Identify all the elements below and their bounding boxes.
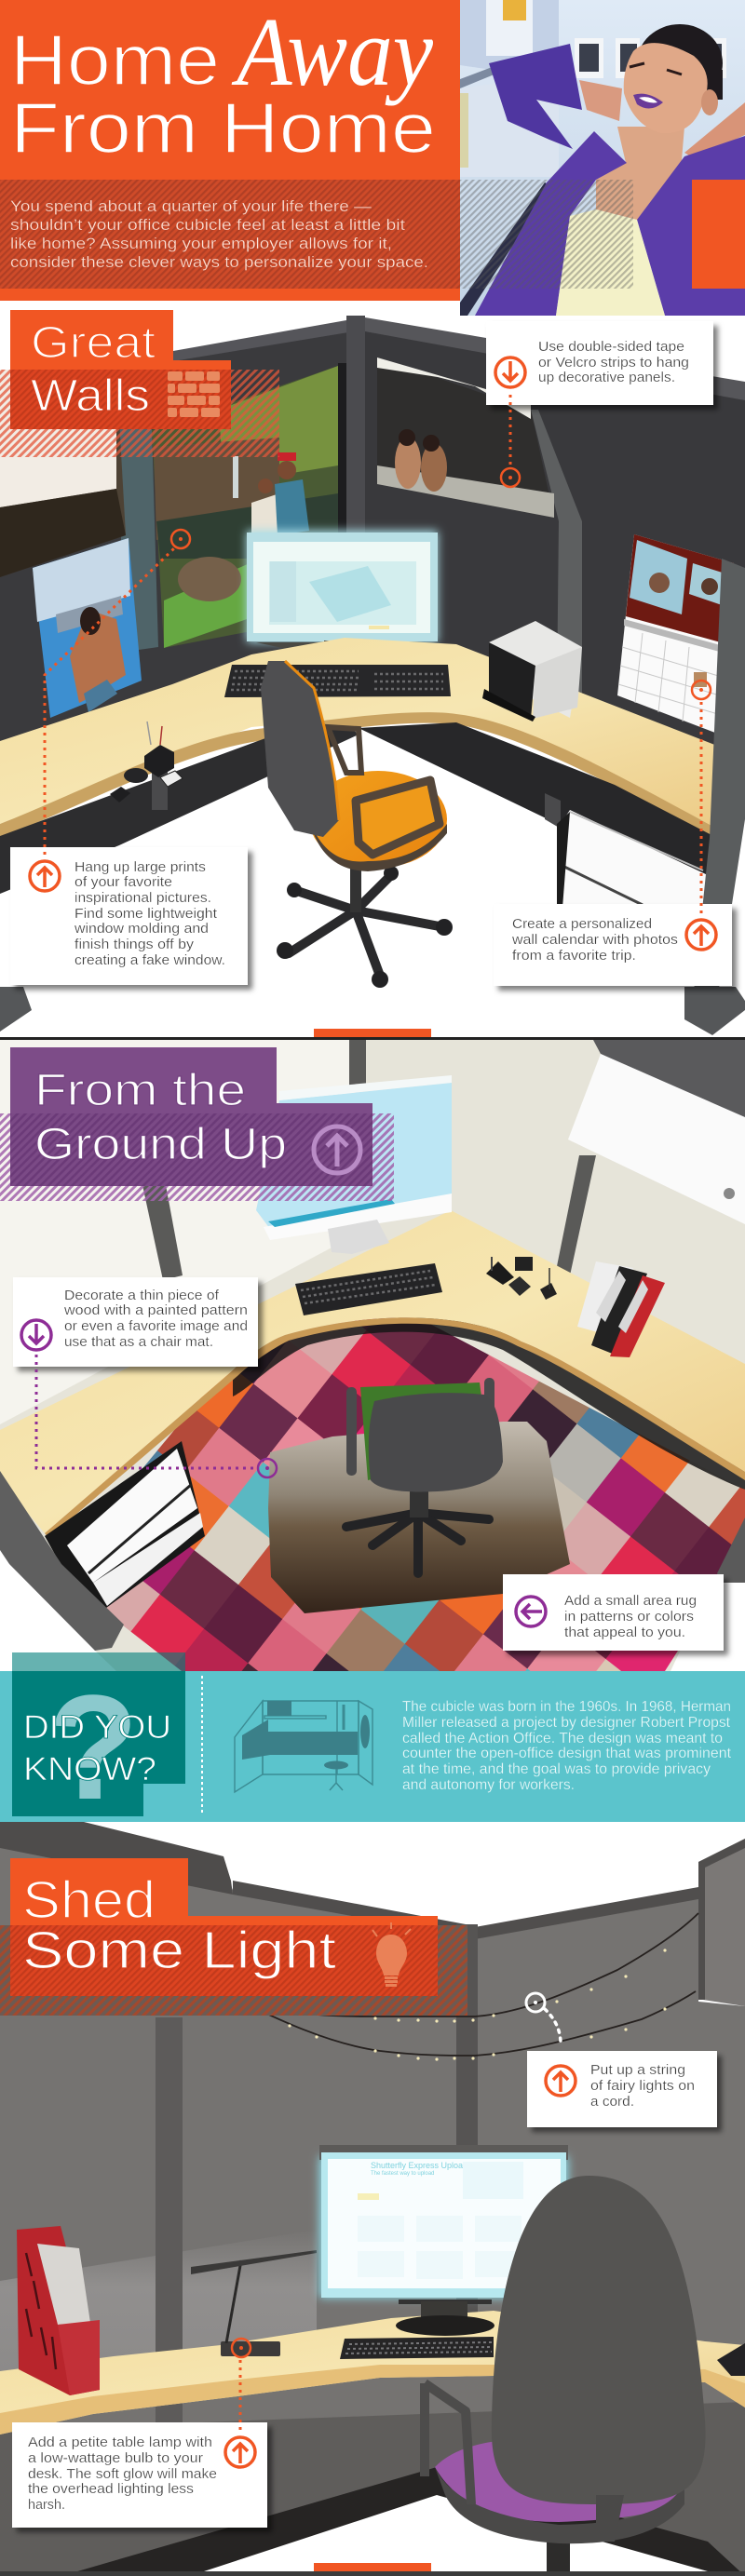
- callout: large prints: of your favorite: [74, 874, 172, 890]
- callout: large prints: finish things off by: [74, 937, 195, 952]
- hair and face: [637, 24, 723, 102]
- heading: shed some light: [10, 1858, 438, 1996]
- picture: couple on boat: [33, 538, 142, 718]
- red magazine file: [17, 2226, 100, 2395]
- scene: shed some light cubicle: [0, 1822, 745, 2576]
- header background: [0, 0, 460, 301]
- desk: [0, 638, 729, 838]
- title: Home: [10, 20, 220, 101]
- picture: beach strip: [0, 370, 126, 577]
- desk accessories: [486, 1257, 557, 1300]
- fact text: [402, 1699, 732, 1793]
- pointer: dotted leader: [232, 2339, 251, 2432]
- office chair, green: [346, 1378, 503, 1573]
- badge: DID YOU: [23, 1709, 171, 1746]
- intro text band: consider these clever ways to personalize your space.: [10, 253, 428, 271]
- callout: wall calendar: from a favorite trip.: [512, 948, 636, 964]
- callout: wall calendar: Create a personalized: [512, 916, 652, 932]
- under-desk floor: [0, 2402, 745, 2576]
- callout: large prints: Hang up large prints: [74, 859, 206, 875]
- under-desk panels: [0, 722, 717, 894]
- badge: [12, 1652, 185, 1830]
- picture: rocks and people: [377, 357, 554, 518]
- pointer: dotted leader: [526, 1993, 561, 2046]
- intro text band: shouldn’t your office cubicle feel at least a little bit: [10, 216, 405, 234]
- fact text: The cubicle was born in the 1960s. In 1968, Herman: [402, 1699, 731, 1715]
- heading: from the ground up: From the: [34, 1066, 246, 1115]
- icon: up arrow: [546, 2066, 576, 2096]
- callout: large prints: inspirational pictures.: [74, 890, 211, 906]
- keyboard: [295, 1263, 442, 1315]
- scene: from the ground up cubicle: [0, 1040, 745, 1671]
- heading: great walls: Great: [31, 318, 156, 368]
- callout: area rug: that appeal to you.: [564, 1625, 685, 1640]
- floor margins: [0, 1545, 745, 1671]
- callout: wall calendar: wall calendar with photos: [511, 932, 678, 948]
- icon: brick wall: [168, 371, 220, 417]
- calendar: [617, 534, 734, 735]
- callout: area rug: Add a small area rug: [564, 1593, 697, 1609]
- pointer: dotted leader: [36, 1355, 277, 1477]
- callout: table lamp: [12, 2339, 267, 2528]
- callout: table lamp: the overhead lighting less: [28, 2481, 194, 2497]
- icon: up arrow: [686, 920, 716, 950]
- title: Away: [231, 0, 433, 106]
- icon: up arrow: [225, 2437, 255, 2467]
- callout: table lamp: a low-wattage bulb to your: [28, 2450, 203, 2466]
- heading: great walls: Walls: [31, 371, 150, 421]
- icon: up arrow: [30, 861, 60, 891]
- fact text: counter the open-office design that was prominent: [402, 1746, 732, 1761]
- hero illustration: woman stretching: [460, 0, 745, 316]
- fact text: and autonomy for workers.: [402, 1777, 575, 1793]
- heading: shed some light: Some Light: [22, 1921, 336, 1980]
- monitor: The fastest way to upload: [371, 2171, 434, 2177]
- keyboard: [224, 665, 451, 697]
- right post and feet: [0, 559, 745, 1035]
- office chair, purple: [425, 2176, 706, 2576]
- callout: large prints: creating a fake window.: [74, 952, 225, 968]
- section divider tab: [0, 1029, 745, 1040]
- callout: fairy lights: Put up a string: [590, 2062, 685, 2078]
- callout: chair mat: wood with a painted pattern: [63, 1302, 248, 1318]
- right post: [717, 1517, 745, 1583]
- callout: large prints: Find some lightweight: [74, 906, 218, 922]
- callout: chair mat: use that as a chair mat.: [64, 1334, 213, 1350]
- callout: fairy lights: [526, 1993, 717, 2127]
- monitor: [319, 2145, 568, 2336]
- icon: down arrow: [495, 357, 525, 387]
- callout: double-sided tape: [486, 321, 713, 487]
- under-desk shadow: [233, 1317, 745, 1490]
- heading: great walls: [10, 310, 231, 429]
- arms and neck: [579, 80, 622, 121]
- callout: fairy lights: of fairy lights on: [590, 2078, 695, 2094]
- fact text: Miller released a project by designer Robert Propst: [402, 1715, 731, 1731]
- heading: from the ground up: Ground Up: [34, 1120, 287, 1169]
- intro text band: You spend about a quarter of your life there —: [10, 197, 372, 215]
- drawers: [45, 1441, 205, 1611]
- drawers: [557, 810, 708, 922]
- callout: chair mat: or even a favorite image and: [64, 1318, 248, 1334]
- heading: shed some light: Shed: [22, 1870, 156, 1930]
- desk phone: [717, 2343, 745, 2376]
- icon: up arrow: [314, 1126, 360, 1173]
- fairy lights: [237, 1913, 698, 2056]
- callout: fairy lights: a cord.: [590, 2094, 634, 2110]
- callout: double-sided tape: Use double-sided tape: [538, 339, 684, 355]
- scene: great walls cubicle: [0, 316, 745, 1035]
- pointer: dotted leader: [501, 395, 520, 487]
- panel: did you know: [0, 1652, 745, 1830]
- callout: chair mat: Decorate a thin piece of: [64, 1288, 220, 1303]
- table lamp: [191, 2250, 317, 2356]
- callout: table lamp: harsh.: [28, 2497, 65, 2513]
- office chair, orange: [261, 661, 453, 988]
- desk: [0, 1210, 745, 1538]
- pointer: dotted leader: [45, 530, 190, 855]
- icon: down arrow: [21, 1320, 51, 1350]
- icon: cubicle drawing: [235, 1701, 372, 1792]
- callout: area rug: [503, 1574, 724, 1651]
- badge: KNOW?: [23, 1751, 156, 1787]
- magazine files: [577, 1261, 665, 1357]
- fact text: called the Action Office. The design was meant to: [402, 1731, 723, 1747]
- stripe band: shed some light: [0, 1925, 467, 2016]
- monitor: [256, 1075, 452, 1254]
- callout: area rug: in patterns or colors: [564, 1609, 694, 1625]
- callout: large prints: [10, 530, 248, 985]
- pointer: dotted leader: [692, 681, 711, 915]
- monitor: Shutterfly Express Uploader: [371, 2161, 475, 2170]
- stripe band: from the ground up: [0, 1113, 394, 1201]
- callout: table lamp: desk. The soft glow will make: [28, 2466, 217, 2482]
- title: From Home: [10, 88, 436, 169]
- desk: [0, 2311, 745, 2434]
- callout: chair mat: [13, 1277, 277, 1477]
- icon: light bulb: [372, 1922, 411, 1987]
- title: [10, 0, 436, 169]
- callout: table lamp: Add a petite table lamp with: [28, 2434, 212, 2450]
- icon: left arrow: [516, 1597, 546, 1626]
- heading: from the ground up: [10, 1047, 372, 1186]
- callout: wall calendar: [494, 681, 732, 986]
- fact text: at the time, and the goal was to provide privacy: [402, 1761, 711, 1777]
- jacket: [489, 44, 582, 149]
- monitor: [247, 531, 438, 668]
- intro text band: [0, 180, 745, 289]
- chair mat with beach photo: [268, 1422, 570, 1613]
- callout: double-sided tape: or Velcro strips to hang: [538, 355, 689, 371]
- desk accessories: [110, 722, 183, 802]
- printer box: [482, 621, 582, 722]
- stripe band: great walls: [0, 370, 279, 457]
- callout: large prints: window molding and: [74, 921, 209, 937]
- rug: [56, 1303, 745, 1671]
- footer tab: [0, 2563, 745, 2576]
- overhead cabinet: [568, 1040, 745, 1224]
- callout: double-sided tape: up decorative panels.: [538, 370, 675, 385]
- badge: ?: [47, 1664, 139, 1830]
- intro text band: like home? Assuming your employer allows for it,: [10, 235, 392, 252]
- keyboard: [340, 2337, 494, 2359]
- left post: [0, 1471, 124, 1651]
- picture: waterfall: [152, 366, 338, 648]
